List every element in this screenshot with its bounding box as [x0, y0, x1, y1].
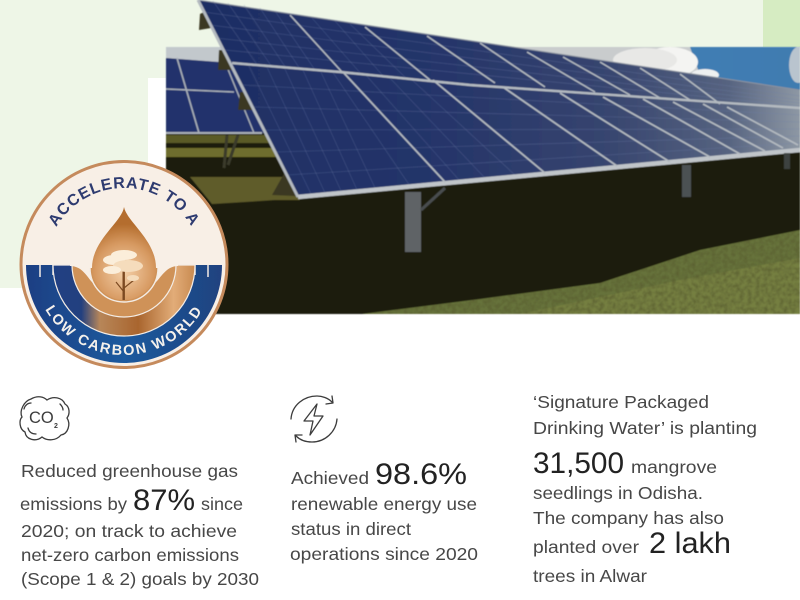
- icon: CO2 cloud: 2: [54, 423, 58, 430]
- text block: renewable energy: [290, 458, 478, 564]
- blue lower band: [26, 265, 222, 363]
- text block: tree planting: mangrove: [631, 457, 717, 477]
- icon: CO2 cloud: [20, 397, 69, 440]
- cell grid: [204, 1, 800, 196]
- badge text bottom: LOW CARBON WORLD: [46, 304, 200, 355]
- icon: renewable energy bolt: [291, 396, 337, 442]
- text block: tree planting: The company has also: [533, 508, 724, 528]
- text block: tree planting: [533, 392, 757, 586]
- text block: greenhouse gas reduction: net-zero carbon emissions: [21, 545, 239, 565]
- text block: tree planting: planted over: [533, 537, 639, 557]
- water drop: [92, 207, 156, 300]
- photo: solar panels in a field: [166, 0, 800, 314]
- supports: [405, 153, 790, 252]
- badge ring: [21, 162, 227, 368]
- panel frames: [198, 0, 800, 197]
- text block: greenhouse gas reduction: since: [201, 494, 243, 514]
- stat: 98.6%: 98.6%: [375, 458, 467, 491]
- text block: greenhouse gas reduction: 2020; on track to achieve: [21, 521, 237, 541]
- back row of panels: [166, 58, 266, 133]
- text block: tree planting: Drinking Water’ is planting: [533, 418, 757, 438]
- text block: greenhouse gas reduction: [20, 461, 259, 589]
- background: pale green panel: [0, 0, 800, 318]
- text block: renewable energy: status in direct: [291, 519, 411, 539]
- ground: [166, 133, 800, 314]
- front array surface: [198, 0, 800, 197]
- text block: renewable energy: renewable energy use: [291, 494, 477, 514]
- text block: greenhouse gas reduction: (Scope 1 & 2) goals by 2030: [21, 569, 259, 589]
- tree: [103, 250, 143, 300]
- text block: greenhouse gas reduction: emissions by: [20, 494, 127, 514]
- badge text top: ACCELERATE TO A: [50, 177, 198, 227]
- stat: 87%: 87%: [133, 484, 195, 517]
- text block: tree planting: ‘Signature Packaged: [533, 392, 709, 412]
- panel mounts: [199, 12, 296, 196]
- text block: renewable energy: Achieved: [291, 468, 369, 488]
- copper bowl: [53, 262, 195, 336]
- text block: greenhouse gas reduction: Reduced greenhouse gas: [21, 461, 238, 481]
- stat: 2 lakh: 2 lakh: [649, 527, 731, 560]
- stat: 31,500: 31,500: [533, 447, 624, 480]
- text block: renewable energy: operations since 2020: [290, 544, 478, 564]
- icon: CO2 cloud: CO: [29, 409, 54, 427]
- text block: tree planting: trees in Alwar: [533, 566, 647, 586]
- text block: tree planting: seedlings in Odisha.: [533, 483, 703, 503]
- badge: Accelerate to a Low Carbon World: [20, 160, 228, 369]
